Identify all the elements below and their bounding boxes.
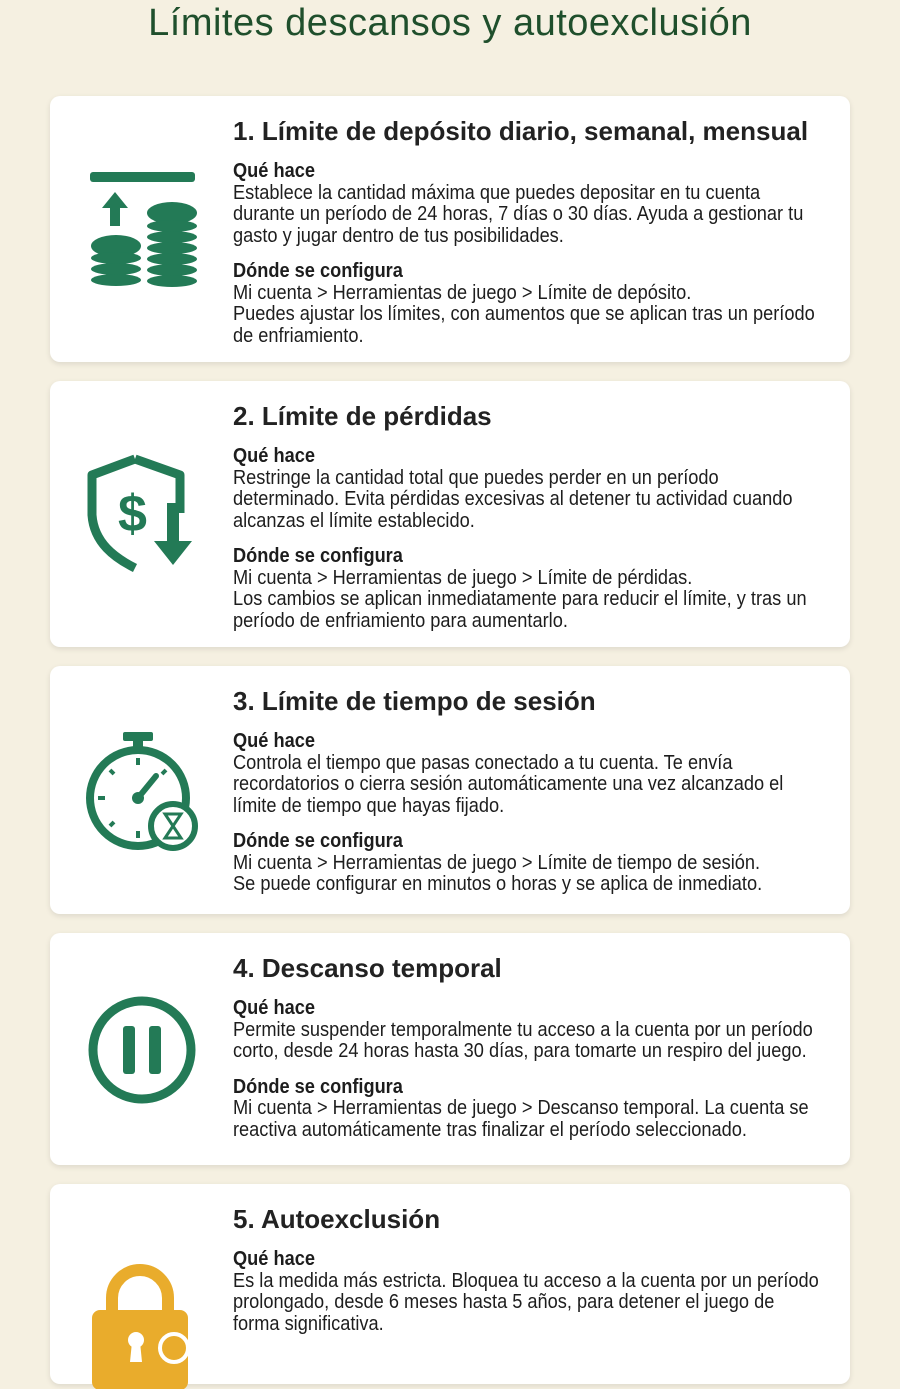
text block 4: Permite suspender temporalmente tu acceso a la cuenta por un período corto, desde 24 horas hasta 30 días, para tomarte un respiro del juego. [233, 1018, 813, 1062]
text block 1: Mi cuenta > Herramientas de juego > Límite de depósito. [233, 282, 691, 304]
text block 4: Mi cuenta > Herramientas de juego > Descanso temporal. La cuenta se reactiva automáticamente tras finalizar el período seleccionado. [233, 1097, 809, 1140]
title: Límites descansos y autoexclusión [148, 2, 752, 44]
text block 1: 1. Límite de depósito diario, semanal, mensual [233, 116, 808, 146]
text block 3: Controla el tiempo que pasas conectado a tu cuenta. Te envía recordatorios o cierra sesión automáticamente una vez alcanzado el límite de tiempo que hayas fijado. [233, 752, 783, 816]
text block 4: Qué hace [233, 997, 315, 1019]
text block 1: Dónde se configura [233, 260, 403, 282]
text block 1 [233, 116, 815, 346]
text block 1: Puedes ajustar los límites, con aumentos que se aplican tras un período de enfriamiento. [233, 303, 815, 346]
text block 1: Qué hace [233, 160, 315, 182]
icon: coins with arrow [90, 172, 197, 287]
panel: card 2 loss limit [50, 381, 850, 647]
text block 2: 2. Límite de pérdidas [233, 401, 492, 431]
text block 2: Qué hace [233, 445, 315, 467]
panel: card 4 temporary break [50, 933, 850, 1165]
text block 2: Restringe la cantidad total que puedes perder en un período determinado. Evita pérdidas excesivas al detener tu actividad cuando alcanzas el límite establecido. [233, 466, 792, 532]
icon: stopwatch [86, 732, 198, 851]
panel: card 1 deposit limit [50, 96, 850, 362]
text block 5 [233, 1204, 819, 1334]
text block 3: Dónde se configura [233, 830, 403, 852]
text block 3: Se puede configurar en minutos o horas y se aplica de inmediato. [233, 873, 762, 895]
text block 2: Dónde se configura [233, 545, 403, 567]
panel: card 3 session time [50, 666, 850, 914]
text block 3: Mi cuenta > Herramientas de juego > Límite de tiempo de sesión. [233, 852, 760, 874]
text block 2 [233, 401, 807, 632]
panel: card 5 self-exclusion [50, 1184, 850, 1384]
text block 3: Qué hace [233, 730, 315, 752]
icon: shield dollar: $ [118, 485, 147, 543]
text block 2: Mi cuenta > Herramientas de juego > Límite de pérdidas. [233, 566, 692, 588]
text block 3 [233, 686, 783, 895]
text block 5: 5. Autoexclusión [233, 1204, 440, 1234]
text block 4: Dónde se configura [233, 1076, 403, 1098]
text block 4 [233, 953, 813, 1140]
icon: padlock with user [92, 1264, 188, 1389]
text block 5: Es la medida más estricta. Bloquea tu acceso a la cuenta por un período prolongado, desde 6 meses hasta 5 años, para detener el juego de forma significativa. [233, 1270, 819, 1334]
text block 5: Qué hace [233, 1248, 315, 1270]
icon: pause [88, 996, 196, 1104]
text block 3: 3. Límite de tiempo de sesión [233, 686, 596, 716]
text block 2: Los cambios se aplican inmediatamente para reducir el límite, y tras un período de enfriamiento para aumentarlo. [233, 588, 807, 632]
text block 1: Establece la cantidad máxima que puedes depositar en tu cuenta durante un período de 24 horas, 7 días o 30 días. Ayuda a gestionar tu gasto y jugar dentro de tus posibilidades. [233, 182, 803, 246]
icon: shield dollar [88, 454, 192, 572]
text block 4: 4. Descanso temporal [233, 953, 502, 983]
